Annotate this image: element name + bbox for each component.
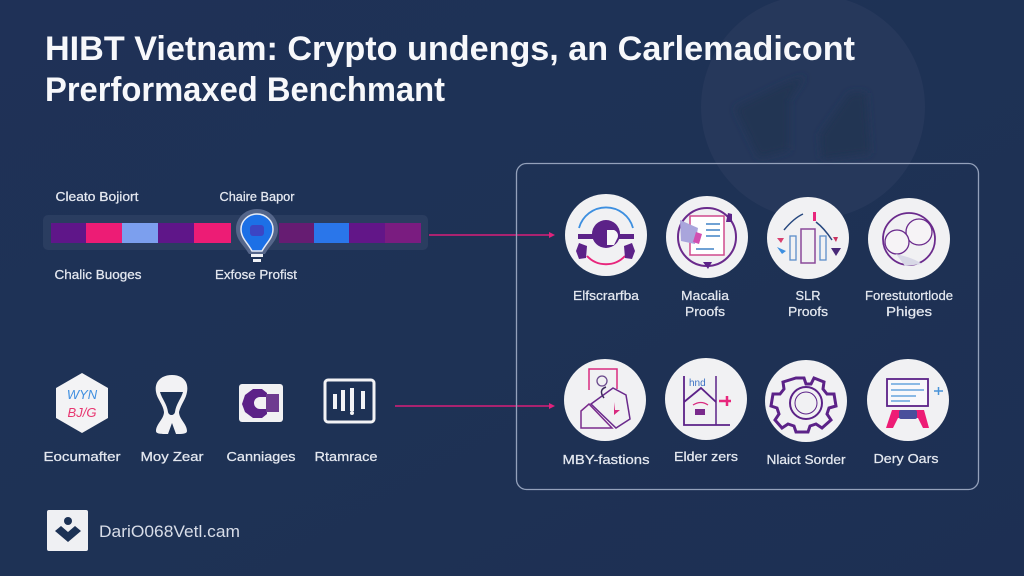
icon row labels xyxy=(44,449,378,464)
bar labels: Cleato Bojiort xyxy=(56,190,139,204)
grid labels: Macalia xyxy=(681,288,730,303)
grid labels: Elder zers xyxy=(674,449,739,464)
grid labels xyxy=(562,288,953,467)
arrow: icons to panel xyxy=(395,403,555,409)
grid labels: Forestutortlode xyxy=(865,288,953,303)
background globe watermark xyxy=(701,0,925,219)
icon: light bulb xyxy=(236,209,278,262)
title: HIBT Vietnam: Crypto undengs, an Carlemadicont xyxy=(45,30,855,68)
panel: timeline bar xyxy=(43,215,428,250)
bar labels: Exfose Profist xyxy=(215,268,298,282)
bar labels: Chaire Bapor xyxy=(220,190,294,204)
icon: document circle xyxy=(666,196,748,278)
grid labels: Dery Oars xyxy=(874,451,939,466)
arrow: bar to panel xyxy=(429,232,555,238)
grid labels: Proofs xyxy=(685,304,726,319)
icon: hexagon badge xyxy=(56,373,108,433)
title: Prerformaxed Benchmant xyxy=(45,71,445,109)
icon row labels: Moy Zear xyxy=(140,449,204,464)
panel: proofs frame xyxy=(516,164,978,490)
icon: hexagon badge: WYN xyxy=(67,387,98,402)
icon row labels: Canniages xyxy=(226,449,296,464)
grid labels: SLR xyxy=(796,288,820,303)
icon row labels: Eocumafter xyxy=(44,449,121,464)
icon: server chart circle xyxy=(767,197,849,279)
icon: gear circle xyxy=(765,360,847,442)
icon: house chart circle: hnd xyxy=(689,378,706,389)
icon row labels: Rtamrace xyxy=(314,449,378,464)
footer url: DariO068Vetl.cam xyxy=(99,522,240,541)
icon: hourglass figure xyxy=(156,375,187,434)
icon: fragments circle xyxy=(564,359,646,441)
icon: hexagon badge: BJ/G xyxy=(68,405,96,420)
icon: monitor circle xyxy=(867,359,949,441)
grid labels: Phiges xyxy=(886,304,933,319)
grid labels: Nlaict Sorder xyxy=(766,452,846,467)
grid labels: MBY-fastions xyxy=(562,452,650,467)
logo xyxy=(47,510,88,551)
grid labels: Elfscrarfba xyxy=(573,288,640,303)
bar labels: Chalic Buoges xyxy=(54,268,142,282)
grid labels: Proofs xyxy=(788,304,829,319)
icon: headset circle xyxy=(565,194,647,276)
icon: sphere circle xyxy=(868,198,950,280)
icon: purple gear tile xyxy=(239,384,283,422)
icon: house chart circle xyxy=(665,358,747,440)
bar labels xyxy=(54,190,298,282)
icon: bar chart box xyxy=(325,380,374,422)
title xyxy=(45,30,855,109)
